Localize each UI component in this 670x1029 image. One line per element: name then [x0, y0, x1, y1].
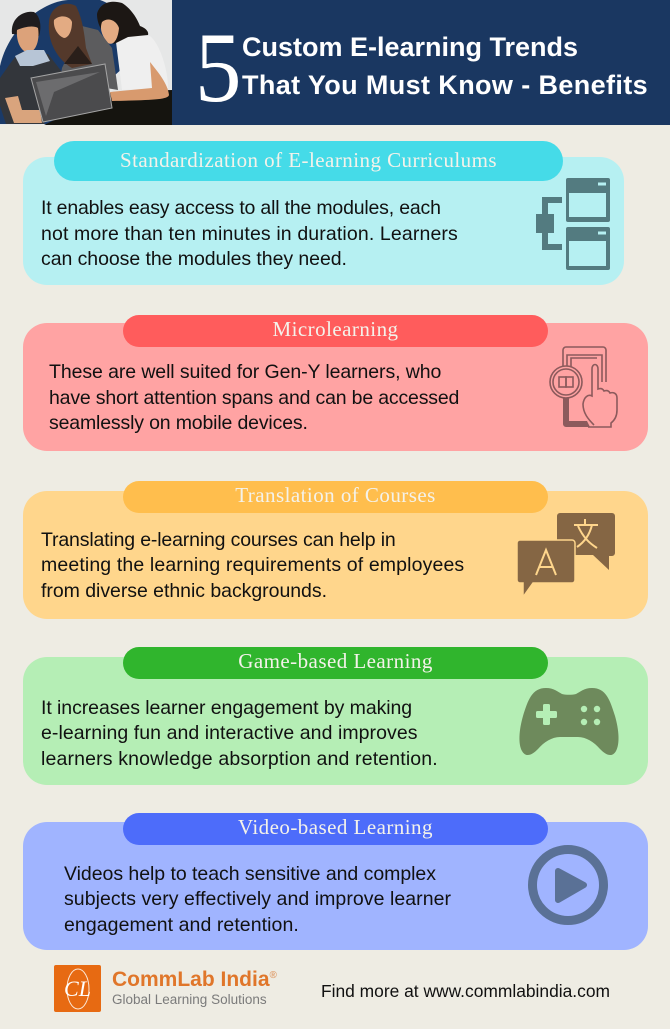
body text: learners knowledge absorption and retention. — [41, 748, 438, 770]
logo tagline: Global Learning Solutions — [112, 992, 267, 1007]
body text: from diverse ethnic backgrounds. — [41, 580, 327, 602]
logo: CommLab India — [54, 965, 277, 1012]
card background — [23, 657, 648, 785]
panel: standardization — [23, 141, 624, 285]
heading pill: Video-based Learning — [238, 815, 433, 839]
man left — [0, 52, 62, 124]
logo name: CommLab India® — [112, 968, 277, 991]
body text: Videos help to teach sensitive and complex — [64, 862, 436, 884]
body text: e-learning fun and interactive and improves — [41, 722, 418, 744]
card background — [23, 323, 648, 451]
header title panel — [172, 0, 670, 125]
title: That You Must Know - Benefits — [242, 70, 648, 100]
body text: Translating e-learning courses can help in — [41, 528, 396, 550]
body text — [49, 361, 459, 434]
body text: can choose the modules they need. — [41, 248, 347, 270]
body text: It enables easy access to all the modules, each — [41, 197, 441, 219]
heading pill — [123, 813, 548, 845]
heading pill — [123, 481, 548, 513]
panel: microlearning — [23, 315, 648, 451]
body text: subjects very effectively and improve learner — [64, 888, 451, 910]
card background — [23, 491, 648, 619]
numeral 5: 5 — [195, 12, 242, 123]
icon: linked windows — [536, 178, 610, 270]
card background — [23, 157, 624, 285]
title: Custom E-learning Trends — [242, 32, 578, 62]
heading pill: Microlearning — [272, 317, 398, 341]
heading pill: Game-based Learning — [238, 649, 433, 673]
body text: meeting the learning requirements of employees — [41, 554, 464, 576]
icon: game controller — [519, 688, 618, 755]
icon: play button — [528, 845, 608, 925]
card background — [23, 822, 648, 950]
body text: seamlessly on mobile devices. — [49, 412, 308, 434]
body text: These are well suited for Gen-Y learners, who — [49, 361, 441, 383]
header band — [0, 0, 670, 125]
website link text: Find more at www.commlabindia.com — [321, 981, 610, 1001]
heading pill: Translation of Courses — [235, 483, 436, 507]
woman right: blouse and arm — [116, 35, 168, 90]
heading pill: Standardization of E-learning Curriculums — [120, 148, 497, 172]
heading pill — [123, 647, 548, 679]
panel: video-based learning — [23, 813, 648, 950]
logo mark — [54, 965, 101, 1012]
laptop — [31, 64, 112, 122]
footer — [54, 965, 610, 1012]
icon: phone and hand — [549, 346, 618, 428]
body text — [41, 696, 438, 770]
body text — [41, 528, 464, 602]
title — [242, 32, 648, 100]
body text: It increases learner engagement by making — [41, 696, 412, 718]
woman middle: jacket and hair — [60, 26, 118, 90]
heading pill — [123, 315, 548, 347]
body text — [41, 197, 458, 270]
logo mark: CL — [64, 976, 91, 1001]
panel: translation — [23, 481, 648, 619]
header illustration: three colleagues at a laptop — [0, 0, 172, 125]
body text — [64, 862, 451, 936]
panel: game-based learning — [23, 647, 648, 785]
heading pill — [54, 141, 563, 181]
body text: not more than ten minutes in duration. Learners — [41, 222, 458, 244]
body text: engagement and retention. — [64, 914, 299, 936]
body text: have short attention spans and can be accessed — [49, 386, 459, 408]
icon: translation speech bubbles — [518, 513, 615, 594]
